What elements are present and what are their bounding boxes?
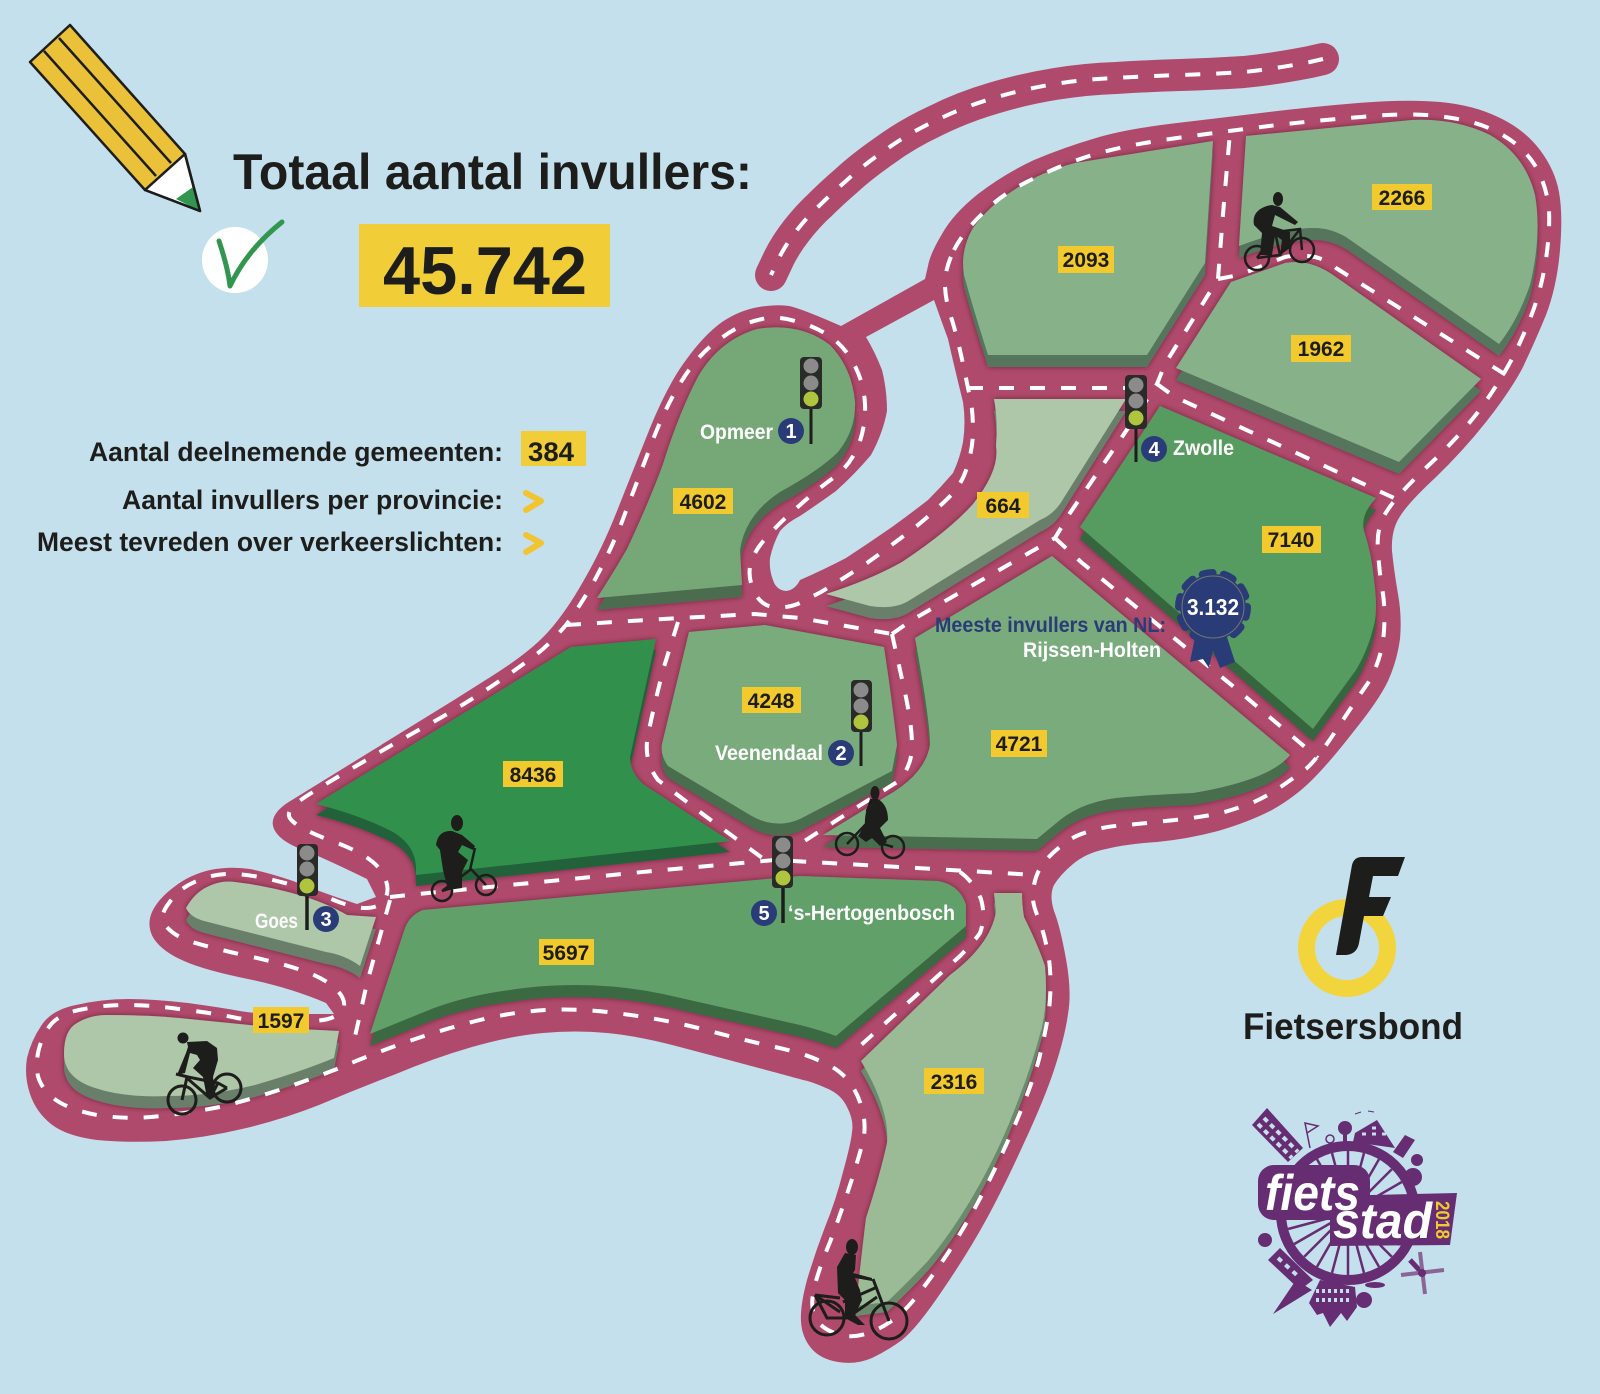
province: Groningen [1239, 120, 1538, 356]
label: Goes 3: 3 [320, 909, 332, 931]
icon: cyclist Zuid-Holland [432, 815, 496, 901]
legend: traffic lights: Meest tevreden over verkeerslichten: [37, 527, 503, 557]
traffic light: 's-Hertogenbosch [772, 836, 793, 923]
province: Drenthe [1176, 262, 1481, 474]
value: Overijssel 7140: 7140 [1268, 529, 1314, 552]
logo: Fietsersbond: Fietsersbond [1243, 1006, 1463, 1047]
value: Noord-Holland 4602 [673, 488, 733, 514]
traffic light: Opmeer [800, 357, 822, 444]
value: Limburg 2316: 2316 [931, 1071, 977, 1094]
label: 's-Hertogenbosch 5 [751, 900, 955, 926]
road: wadden route [771, 59, 1323, 275]
legend: per province: Aantal invullers per provincie: [122, 485, 503, 515]
traffic light: Veenendaal [851, 680, 872, 766]
province: Zuid-Holland [316, 639, 730, 886]
label: 's-Hertogenbosch 5: ‘s-Hertogenbosch [788, 902, 955, 925]
legend [37, 431, 586, 557]
lake: IJsselmeer [770, 300, 964, 591]
value: Noord-Holland 4602: 4602 [680, 491, 726, 514]
traffic light: Zwolle [1125, 375, 1147, 462]
logo: Fietsstad 2018 [1252, 1108, 1457, 1327]
icon: cyclist Zeeland [168, 1032, 241, 1114]
value: Flevoland 664: 664 [985, 495, 1021, 518]
label: Opmeer 1: 1 [785, 421, 797, 443]
value: Drenthe 1962 [1291, 335, 1351, 362]
icon: check mark [202, 222, 282, 293]
legend: municipalities: 384 [528, 437, 574, 467]
province: Utrecht [662, 625, 897, 836]
province: Gelderland [823, 556, 1290, 851]
province: Noord-Holland [597, 327, 855, 610]
province: Flevoland [826, 399, 1126, 619]
label: Veenendaal 2: Veenendaal [715, 742, 823, 765]
value: Limburg 2316 [924, 1068, 984, 1094]
value: Flevoland 664 [977, 492, 1029, 518]
callout: most respondents: Rijssen-Holten [1023, 639, 1161, 662]
icon: cyclist Gelderland [836, 786, 904, 858]
label: Veenendaal 2: 2 [835, 743, 847, 765]
value: Zeeland 1597: 1597 [258, 1010, 304, 1033]
value: Groningen 2266 [1372, 184, 1432, 210]
label: Zwolle 4: 4 [1148, 439, 1160, 461]
wordmark [1258, 1165, 1370, 1220]
label: Zwolle 4 [1141, 436, 1234, 462]
callout: most respondents: Meeste invullers van NL: [935, 614, 1166, 637]
legend: municipalities: Aantal deelnemende gemeenten: [89, 437, 503, 467]
label: Goes 3 [255, 906, 339, 933]
logo: Fietsersbond [1243, 857, 1463, 1047]
value labels [253, 184, 1432, 1094]
icon: rosette 3.132: 3.132 [1187, 594, 1239, 620]
icon: cyclist Groningen [1245, 192, 1314, 270]
icon: cyclist Limburg [810, 1239, 907, 1339]
value: Gelderland 4721: 4721 [996, 733, 1043, 756]
traffic light: Goes [297, 844, 318, 930]
logo: Fietsstad 2018: fiets [1265, 1165, 1360, 1221]
province: Limburg [856, 893, 1046, 1316]
icon: pencil [30, 25, 200, 211]
value: Zuid-Holland 8436 [503, 761, 563, 787]
province: Zeeland north [186, 882, 376, 978]
province: Zeeland south [64, 1015, 339, 1108]
label: Zwolle 4: Zwolle [1173, 437, 1234, 460]
logo: Fietsstad 2018: 2018 [1431, 1201, 1452, 1239]
wheel [1281, 1146, 1415, 1280]
province: Noord-Brabant [370, 876, 966, 1048]
value: Utrecht 4248: 4248 [748, 690, 795, 713]
label: 's-Hertogenbosch 5: 5 [758, 903, 770, 925]
city silhouette [1252, 1108, 1444, 1327]
value: Overijssel 7140 [1262, 526, 1321, 553]
total count: 45.742 [383, 233, 587, 309]
value: Groningen 2266: 2266 [1379, 187, 1425, 210]
label: Goes 3: Goes [255, 910, 298, 933]
value: Drenthe 1962: 1962 [1298, 338, 1344, 361]
label: Opmeer 1 [700, 418, 804, 444]
value: Noord-Brabant 5697: 5697 [543, 942, 589, 965]
province: Friesland [963, 141, 1213, 367]
icon: rosette 3.132 [1179, 573, 1247, 668]
value: Friesland 2093: 2093 [1063, 249, 1109, 272]
value: Zuid-Holland 8436: 8436 [510, 764, 556, 787]
callout: most respondents [935, 614, 1166, 662]
province: Overijssel [1080, 406, 1376, 741]
title: Totaal aantal invullers: [233, 144, 752, 200]
logo: Fietsstad 2018: stad [1333, 1193, 1433, 1249]
label: Opmeer 1: Opmeer [700, 421, 773, 444]
